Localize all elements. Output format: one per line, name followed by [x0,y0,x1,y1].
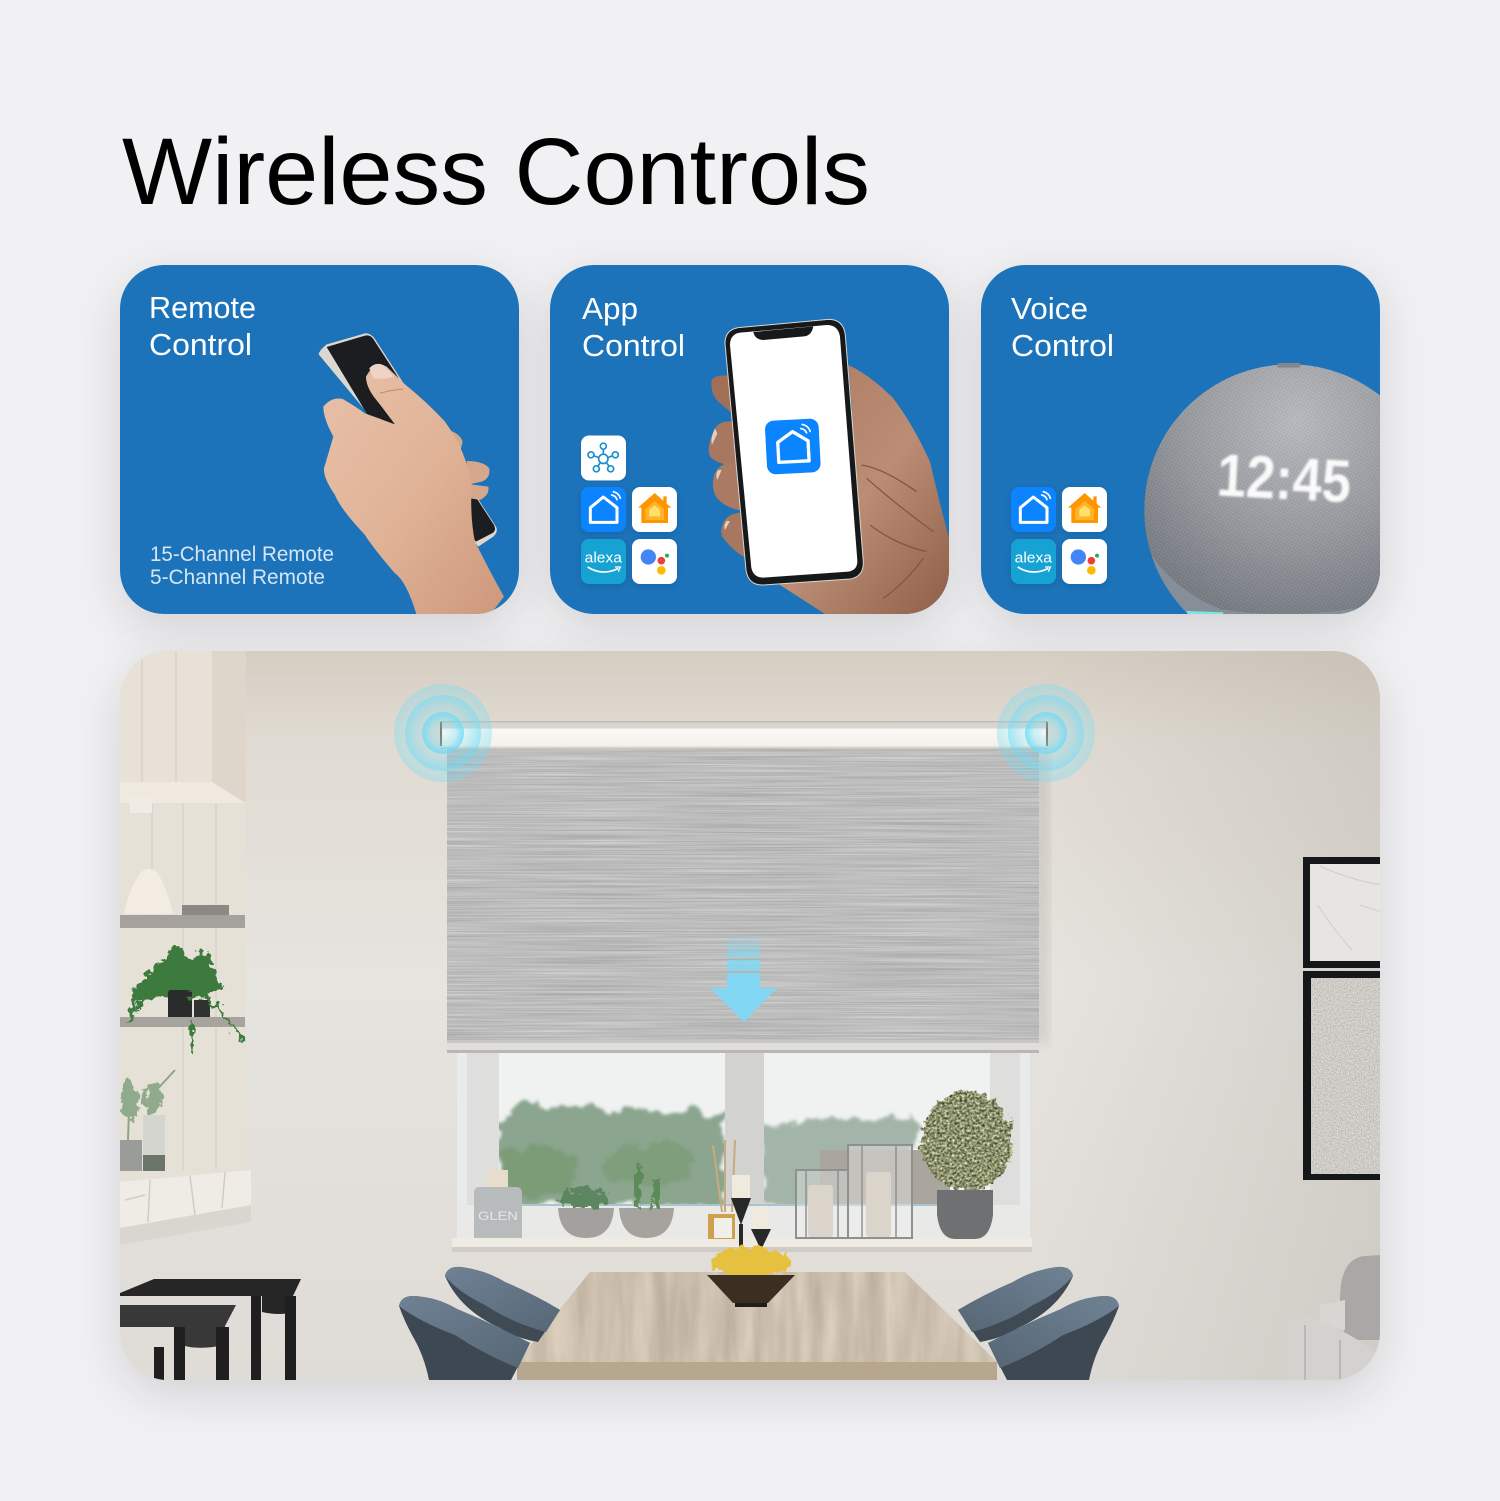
arrow: shade moves down [710,933,777,1022]
signal rings left [394,684,492,782]
icon: smart life [1011,487,1056,532]
illustration: hand holding phone [709,319,950,615]
icon: smartthings [581,436,626,480]
wall pictures [1303,857,1383,1180]
chairs right [958,1267,1119,1380]
bowl of corn [707,1247,795,1307]
icon: smart home app on phone screen [765,418,821,475]
heading: app control: Control [582,328,685,363]
text: remote channel options: 5-Channel Remote [150,566,325,589]
armchair [1304,1255,1380,1380]
icon: smart life [581,487,626,532]
stools [120,1279,301,1380]
dining table [517,1272,997,1380]
window sill decor: GLEN [478,1209,518,1223]
panel: room photo with roller shade [120,651,1383,1380]
icon: alexa [1011,539,1056,584]
icon: google assistant [632,539,677,584]
icon: apple home [632,487,677,532]
panel: app control [550,265,950,615]
heading: voice control: Control [1011,328,1114,363]
panel: voice control [981,265,1436,656]
clock display: 12:45 [1215,442,1353,515]
potted plant [921,1091,1013,1191]
headrail [440,721,1048,749]
marble counter [120,1170,251,1228]
heading: app control: App [582,291,638,326]
wall [246,651,1380,1200]
window sill decor [474,1091,1013,1254]
signal rings right [997,684,1095,782]
illustration: smart speaker with clock [1144,363,1380,614]
icon: google assistant [1062,539,1107,584]
heading: remote control: Control [149,327,252,362]
text: remote channel options: 15-Channel Remote [150,543,334,566]
window [452,1050,1032,1252]
heading: remote control: Remote [149,290,256,325]
icon: alexa [581,539,626,584]
chairs left [399,1267,560,1380]
panel: remote control [120,265,519,615]
candle lanterns [796,1170,848,1238]
icon: apple home [1062,487,1107,532]
left fingers [711,376,731,412]
built-in shelving [120,651,251,1245]
roller shade [447,748,1046,1053]
heading: voice control: Voice [1011,291,1088,326]
illustration: hand holding remote [319,333,504,615]
title: Wireless Controls [122,119,870,225]
